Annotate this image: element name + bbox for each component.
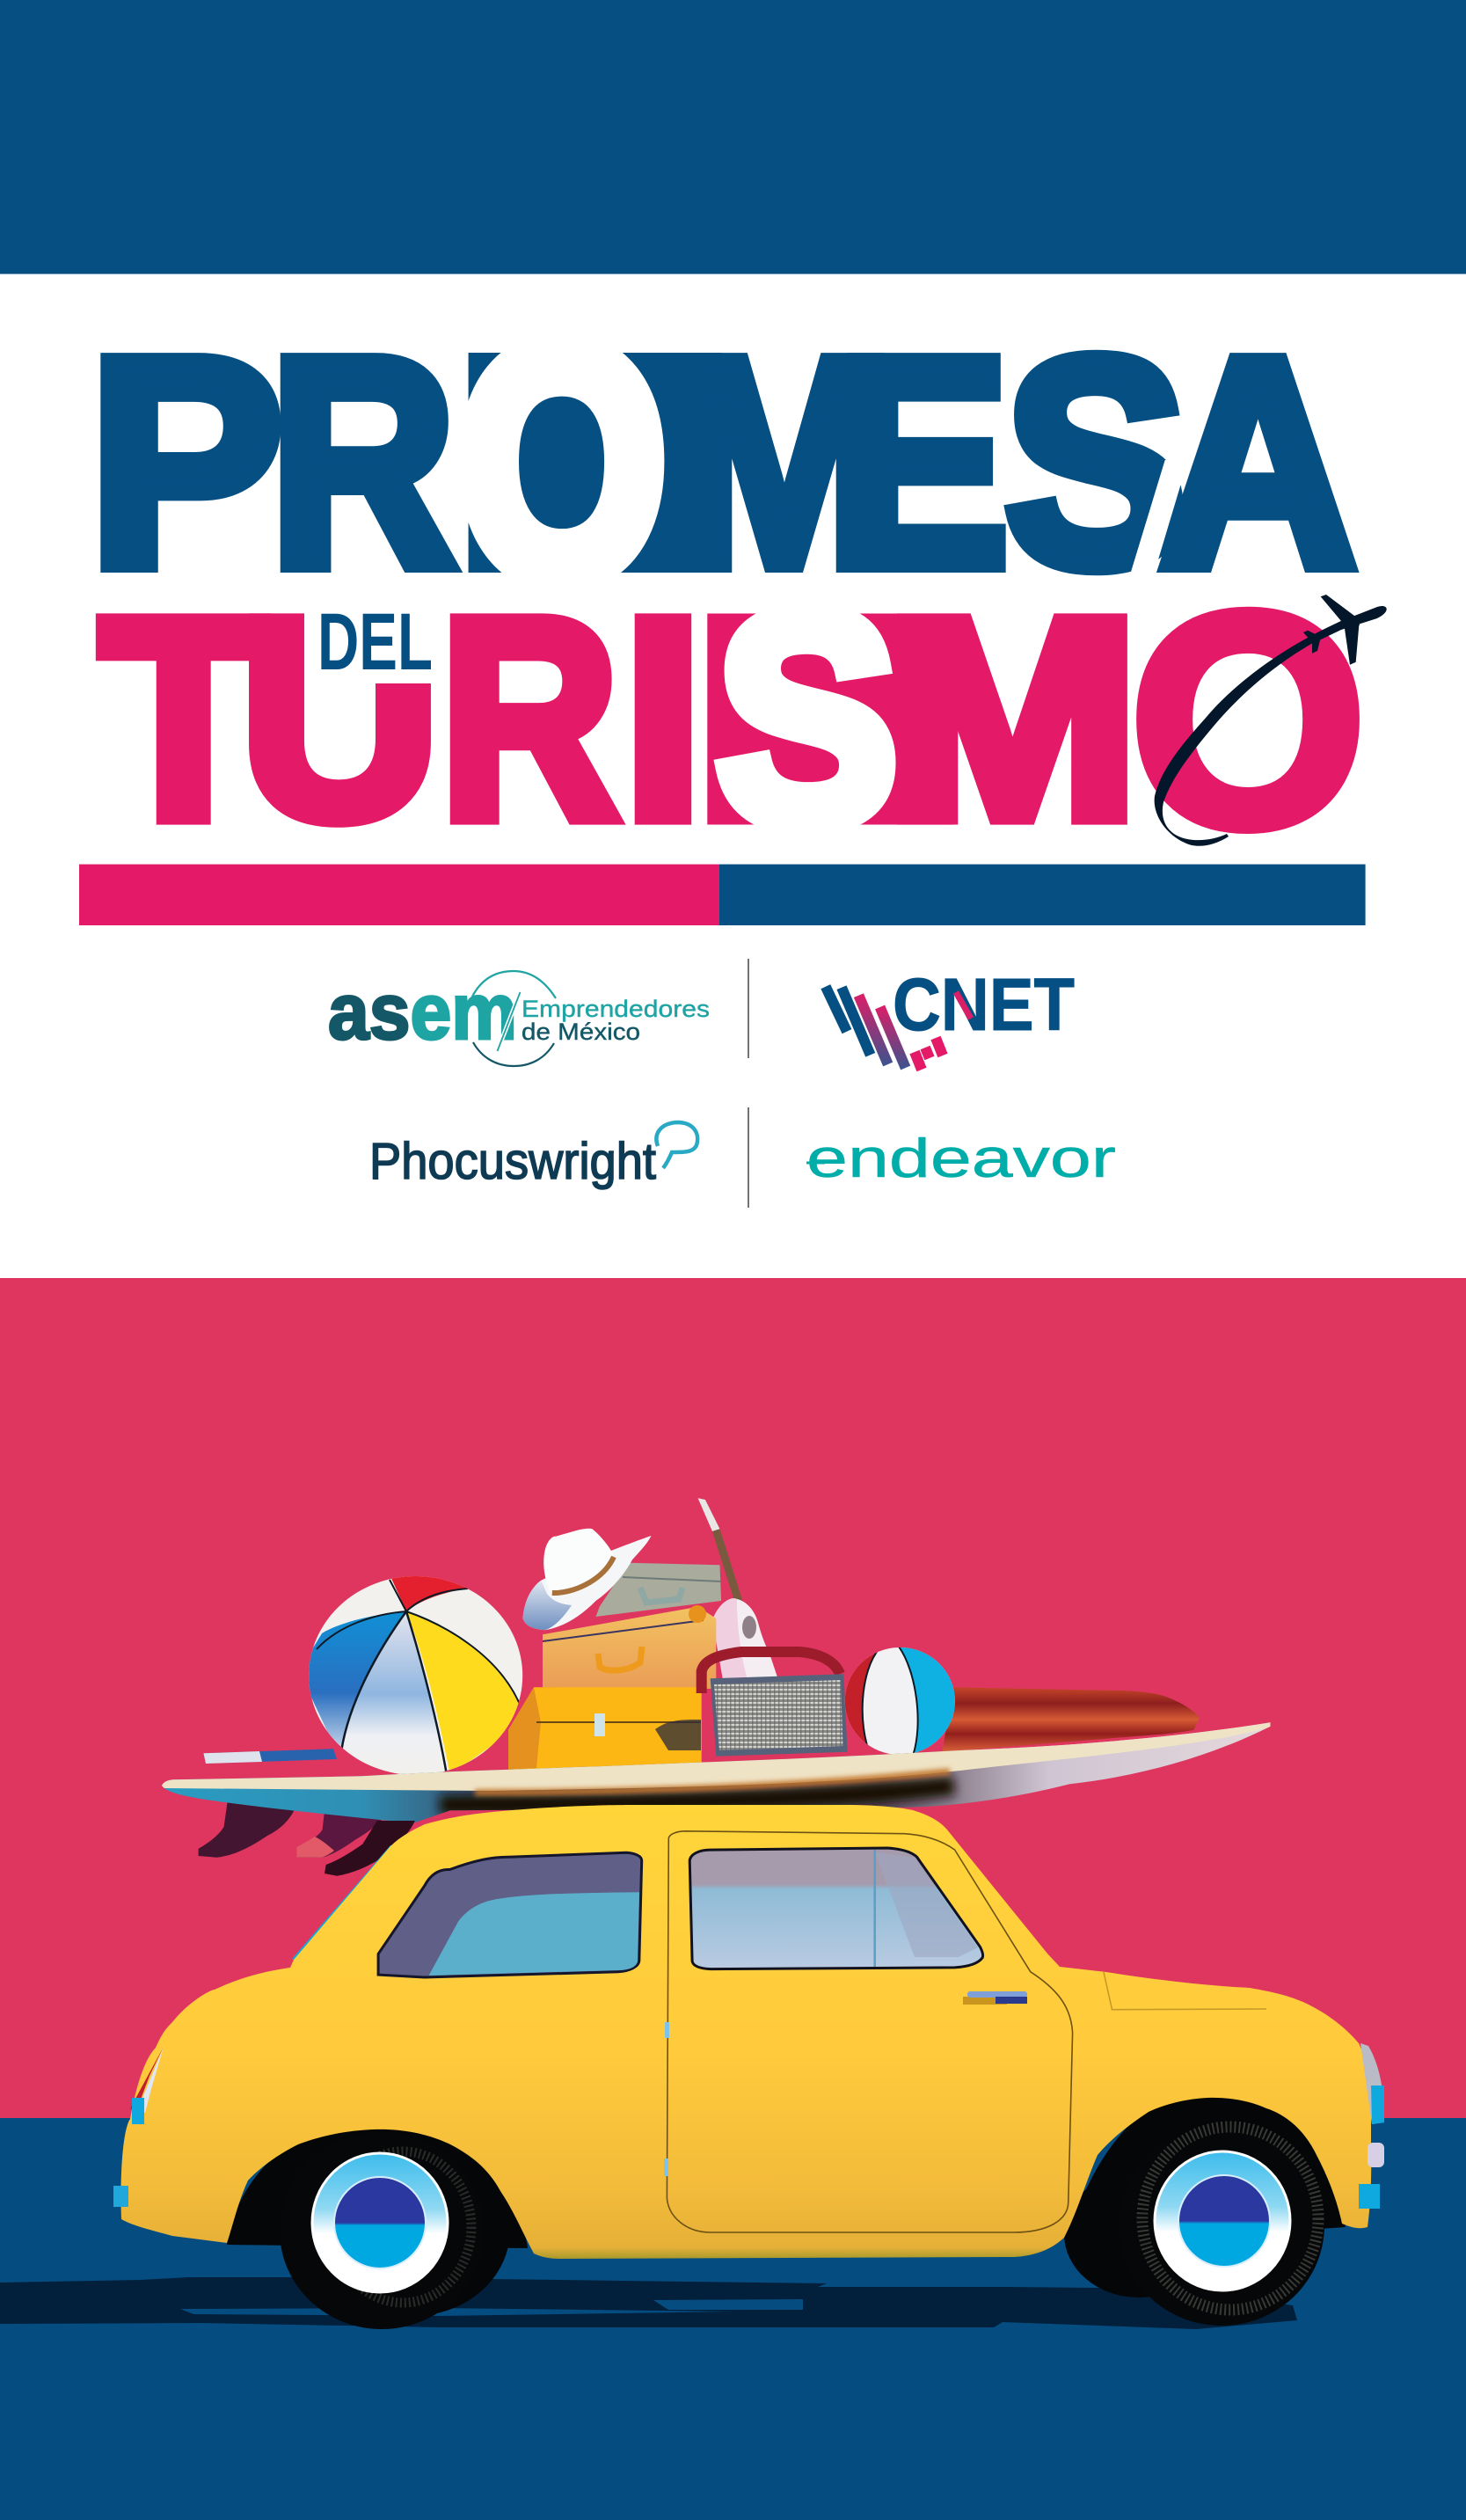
title: TURISMO: R bbox=[441, 561, 618, 878]
title: PROMESA: A bbox=[1160, 297, 1356, 628]
title: TURISMO bbox=[100, 551, 1366, 890]
title: TURISMO: O bbox=[1130, 551, 1366, 890]
logo: endeavor: endeavor bbox=[806, 1129, 1116, 1189]
logo: Phocuswright: Phocuswright bbox=[369, 1133, 656, 1190]
surfboard fin bbox=[325, 1821, 415, 1876]
beach ball: small bbox=[844, 1647, 955, 1754]
red paddle board bbox=[942, 1687, 1200, 1752]
title: DEL: DEL bbox=[317, 597, 433, 687]
rear window bbox=[378, 1852, 642, 1977]
title: PROMESA: S bbox=[1004, 297, 1186, 628]
beach ball: large bbox=[299, 1574, 522, 1777]
inner tyres behind the car bbox=[227, 2089, 1346, 2316]
title underline bar bbox=[79, 865, 1366, 925]
title: PROMESA: P bbox=[89, 297, 283, 628]
title: TURISMO: S bbox=[718, 552, 897, 887]
logo: ASEM Emprendedores de México: asem bbox=[328, 968, 517, 1056]
suitcase: bottom yellow bbox=[508, 1687, 702, 1770]
logo: CNET bbox=[826, 963, 1075, 1070]
rear tail light and bumper bbox=[113, 2047, 164, 2207]
title: PROMESA: O bbox=[459, 279, 665, 646]
stick behind beach ball bbox=[203, 1749, 337, 1764]
surfboard bbox=[162, 1722, 1270, 1822]
suitcase: middle orange bbox=[543, 1605, 716, 1689]
front wheel bbox=[1119, 2125, 1324, 2326]
radio speaker bbox=[702, 1652, 848, 1757]
title: PROMESA: E bbox=[837, 297, 1009, 628]
car floor shadow bbox=[0, 2277, 1297, 2329]
guitar bbox=[698, 1498, 778, 1680]
title: PROMESA bbox=[89, 279, 1356, 646]
title: TURISMO: M bbox=[885, 561, 1139, 878]
door outline bbox=[667, 1831, 1073, 2232]
logo: CNET: CNET bbox=[893, 963, 1075, 1046]
icon: airplane with swoosh bbox=[1155, 595, 1387, 846]
hood seam bbox=[1104, 1972, 1266, 2010]
rear wheel bbox=[280, 2132, 484, 2329]
title: TURISMO: U bbox=[240, 561, 440, 878]
yellow car body bbox=[120, 1805, 1371, 2259]
front window bbox=[689, 1848, 983, 1969]
logo: ASEM Emprendedores de México bbox=[328, 968, 710, 1066]
title: TURISMO: T bbox=[100, 561, 266, 878]
background: white logo panel bbox=[0, 274, 1466, 1278]
title: PROMESA: R bbox=[270, 297, 456, 628]
cowboy hat bbox=[523, 1529, 651, 1630]
surfboard fin bbox=[297, 1798, 396, 1858]
door handle bbox=[963, 1991, 1027, 2005]
suitcase: top grey bbox=[596, 1563, 721, 1617]
front headlight and bumpers bbox=[1359, 2043, 1384, 2209]
surfboard fin bbox=[199, 1801, 297, 1858]
divider: top row bbox=[748, 959, 749, 1058]
logo: ASEM Emprendedores de México: de México bbox=[521, 1019, 640, 1045]
background: top blue band bbox=[0, 0, 1466, 274]
title: PROMESA: M bbox=[673, 297, 895, 628]
title: TURISMO: I bbox=[624, 561, 703, 878]
divider: bottom row bbox=[748, 1107, 749, 1208]
logo: ASEM Emprendedores de México: Emprendedores bbox=[521, 996, 710, 1022]
background: pink scene wall bbox=[0, 1278, 1466, 2118]
background: blue floor bbox=[0, 2118, 1466, 2520]
rear cyan glass sliver bbox=[292, 1845, 397, 1963]
door hinges bbox=[664, 2022, 669, 2176]
